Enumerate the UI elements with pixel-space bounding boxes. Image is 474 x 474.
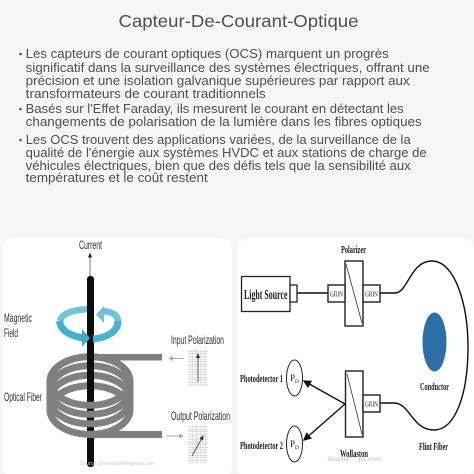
bullet 1 (19, 46, 430, 101)
conductor (422, 312, 446, 372)
grin lens output (363, 395, 380, 412)
magnetic field label (4, 311, 32, 340)
bullet 2 (19, 101, 422, 129)
current conductor (87, 276, 94, 467)
coil back arcs (50, 357, 130, 410)
current label: Current (79, 238, 102, 252)
optical fiber output lead (87, 431, 162, 438)
grin lens left (328, 285, 345, 302)
light source box: Light Source (244, 287, 288, 302)
flint fiber label: Flint Fiber (419, 442, 448, 453)
bullet 3 (19, 132, 427, 185)
optical fiber input lead (94, 354, 162, 360)
photodetector 1: P (290, 373, 295, 383)
input polarization label: Input Polarization (171, 333, 224, 347)
magnetic field label: Magnetic (4, 311, 32, 325)
source watermark: Source: ...ps.com (327, 456, 381, 463)
output polarization grid (188, 426, 208, 463)
bullet 3: qualité de l'énergie aux systèmes HVDC et aux stations de charge de (26, 145, 427, 160)
input polarization grid (188, 349, 208, 386)
bullet 1: transformateurs de courant traditionnels (26, 86, 266, 101)
bullet 2: changements de polarisation de la lumière dans les fibres optiques (26, 114, 422, 129)
photodetector 2: P (290, 439, 295, 449)
bullet 1: significatif dans la surveillance des systèmes électriques, offrant une (26, 60, 430, 75)
photodetector 2 (240, 426, 302, 462)
polarizer prism (345, 261, 363, 326)
grin lens output: GRIN (365, 400, 378, 408)
wollaston prism (346, 371, 363, 437)
conductor label: Conductor (420, 382, 449, 393)
input fiber line (297, 292, 328, 294)
photodetector 2: Photodetector 2 (240, 441, 283, 452)
flint fiber loop (380, 261, 468, 430)
title: Capteur-De-Courant-Optique (118, 11, 358, 31)
wollaston label: Wollaston (340, 449, 368, 460)
bullet 2: Basés sur l'Effet Faraday, ils mesurent le courant en détectant les (26, 101, 404, 116)
photodetector 2: D (295, 445, 299, 451)
grin lens right: GRIN (365, 290, 378, 298)
arrow to photodetector 1 (304, 381, 345, 404)
bullet 1: Les capteurs de courant optiques (OCS) marquent un progrès (26, 46, 389, 61)
arrow to photodetector 2 (304, 404, 345, 440)
magnetic field ring back (60, 309, 88, 321)
bullet 3: véhicules électriques, bien que des défis tels que la sensibilité aux (26, 158, 411, 173)
panel: Faraday coil diagram (3, 238, 232, 474)
grin lens right (363, 285, 380, 302)
photodetector 1: Photodetector 1 (240, 374, 283, 385)
bullet list (19, 46, 430, 185)
magnetic field label: Field (4, 326, 18, 340)
source watermark: Source: powersystemsgroup.com (80, 461, 155, 467)
grin lens left: GRIN (330, 290, 343, 298)
light source box (242, 276, 297, 312)
bullet 3: températures et le coût restent (26, 170, 208, 185)
bullet 3: Les OCS trouvent des applications variées, de la surveillance de la (26, 132, 411, 147)
optical fiber label: Optical Fiber (4, 390, 42, 404)
photodetector 1: D (295, 379, 299, 385)
output arrow (167, 434, 184, 438)
bullet 1: précision et une isolation galvanique supérieures par rapport aux (26, 73, 410, 88)
input arrow (168, 356, 184, 361)
current arrow (89, 256, 91, 277)
panel: optical sensor schematic (237, 238, 474, 474)
magnetic field ring front (60, 306, 118, 347)
polarizer label: Polarizer (341, 245, 366, 256)
output polarization label: Output Polarization (171, 409, 230, 423)
photodetector 1 (240, 360, 302, 396)
coil front arcs (50, 381, 130, 434)
